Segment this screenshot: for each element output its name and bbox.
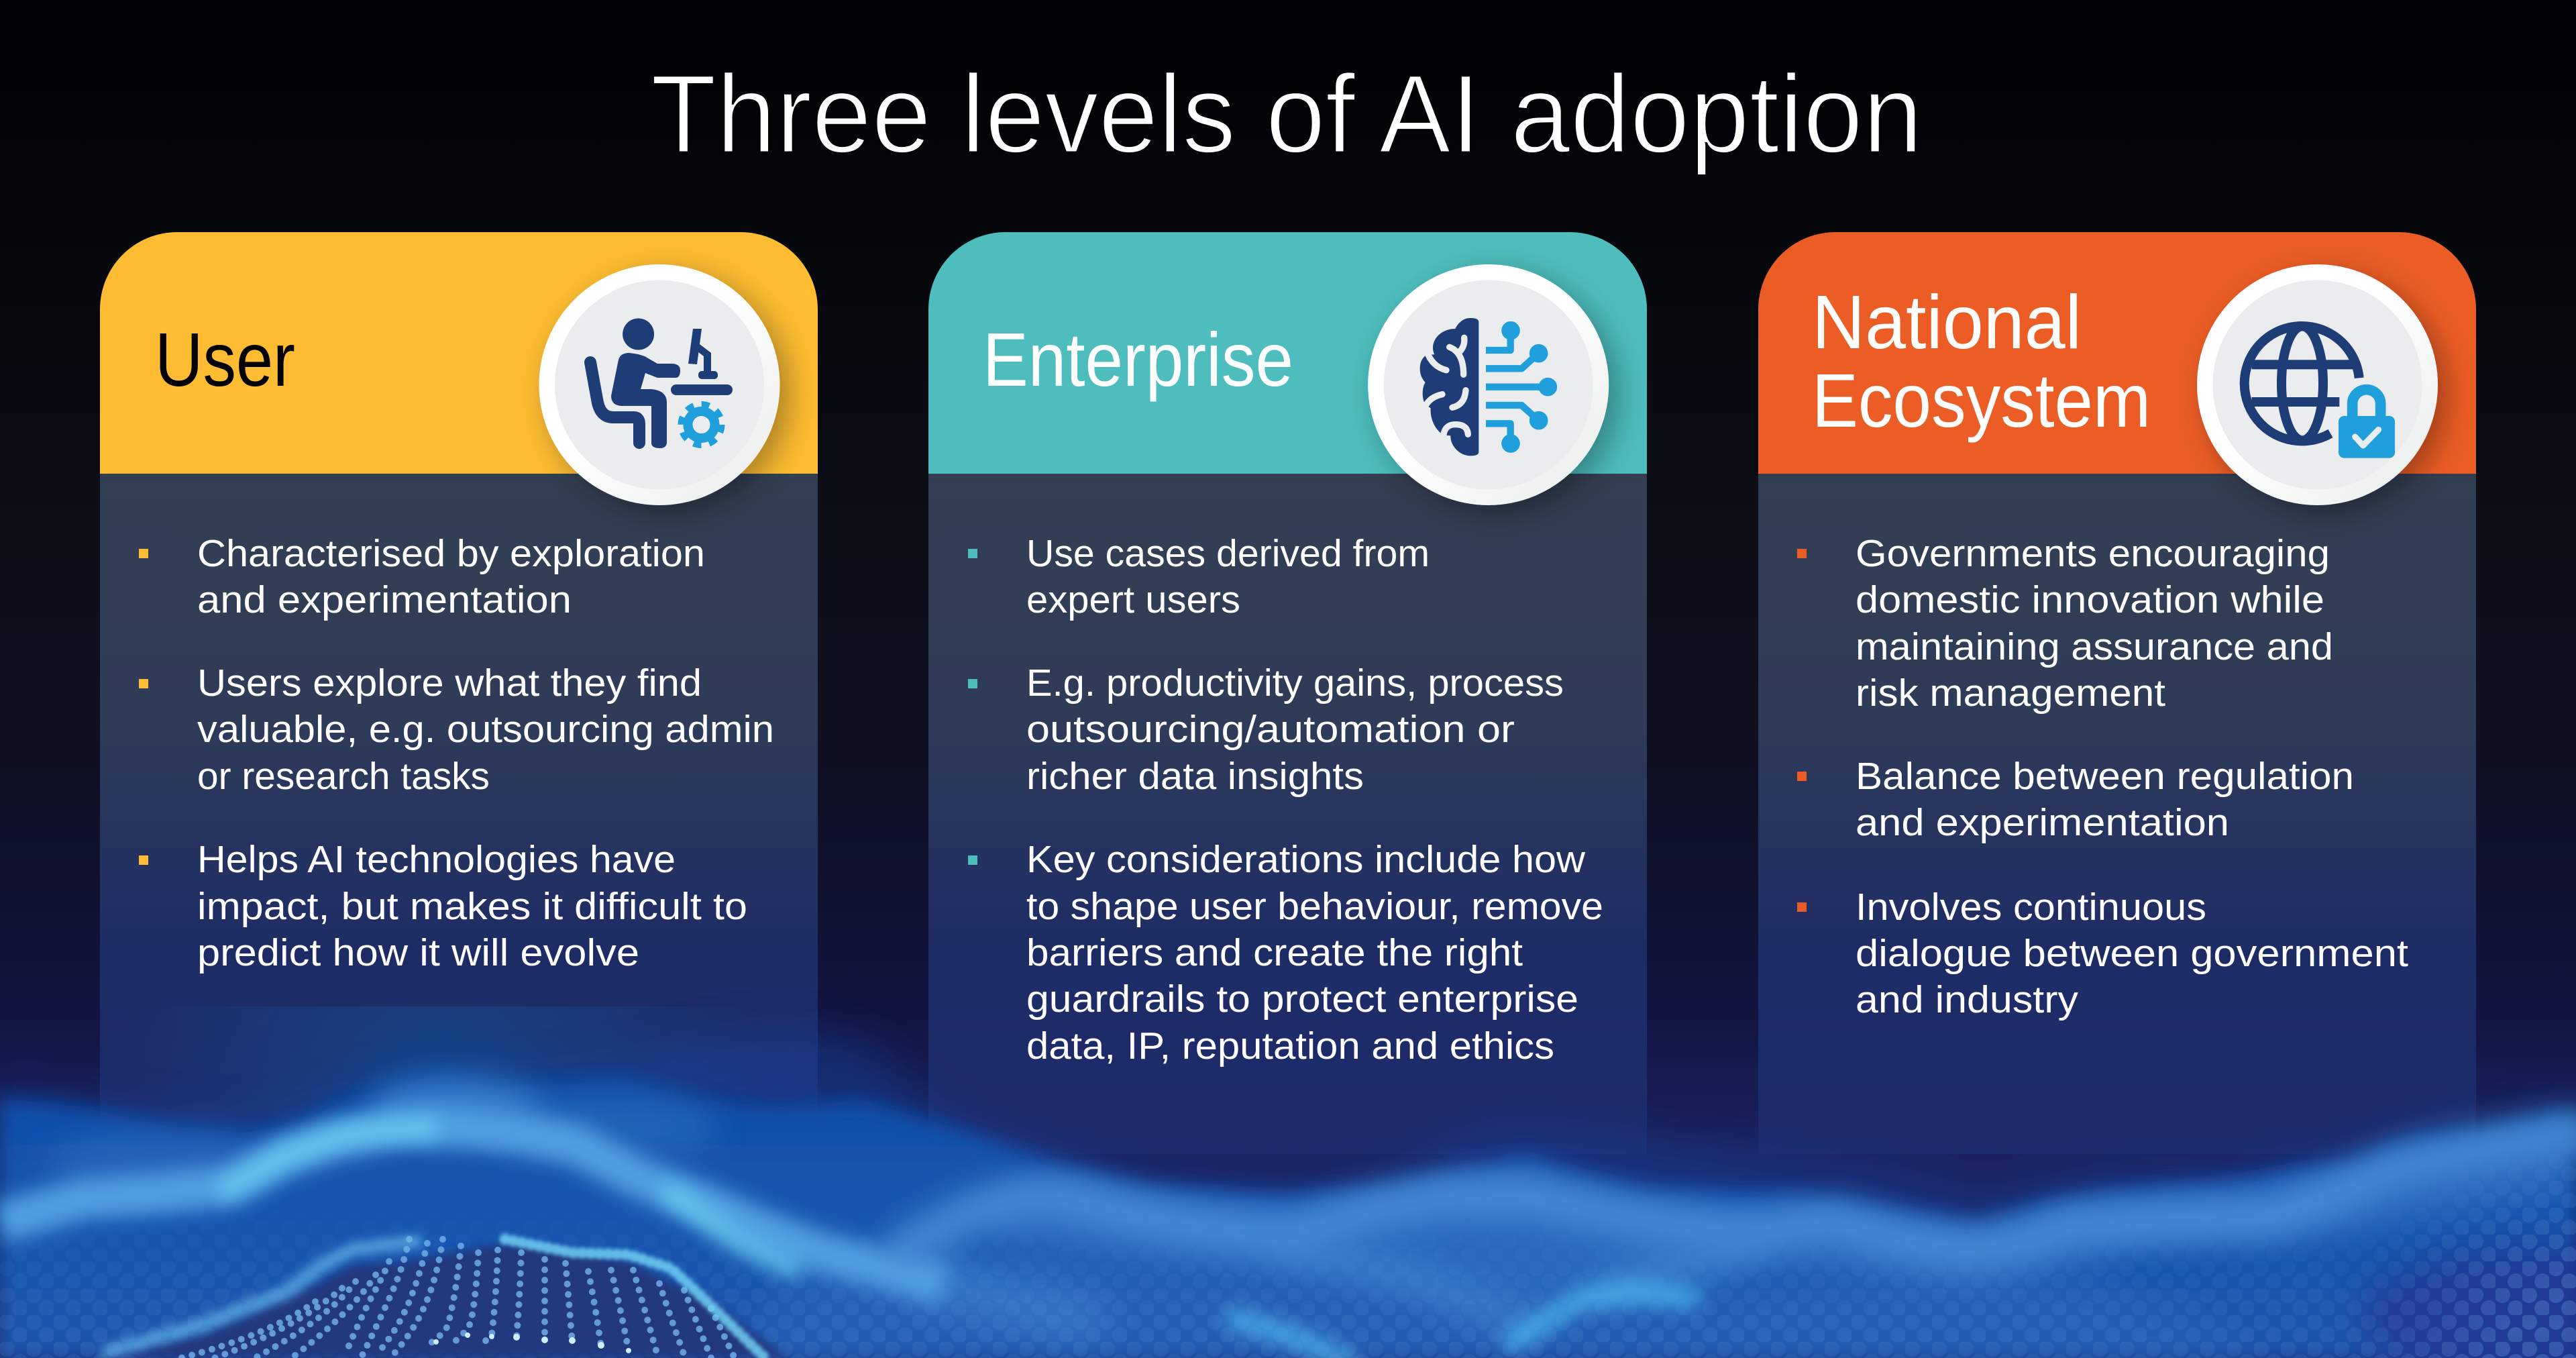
bullet list: National Ecosystem: risk management (1856, 672, 2165, 715)
bullet list: User: Users explore what they find (197, 662, 702, 704)
glow behind first peak (107, 1006, 778, 1221)
bullet list: User (139, 532, 774, 974)
bullet list: Enterprise: expert users (1026, 578, 1240, 621)
bullet list: National Ecosystem (1797, 532, 2408, 1021)
panel body: Enterprise (928, 232, 1647, 1154)
bullet list: Enterprise (968, 532, 1603, 1067)
broad middle haze (973, 1127, 2576, 1308)
bullet list: National Ecosystem: dialogue between government (1856, 932, 2408, 975)
bullet list: National Ecosystem: Governments encouraging (1856, 532, 2330, 575)
faint upper haze (0, 1027, 2576, 1358)
bullet list: User: and experimentation (197, 578, 572, 621)
bullet list: National Ecosystem: and industry (1856, 978, 2079, 1021)
wave: particle landscape (0, 1006, 2576, 1358)
bottom lighter haze (738, 1241, 2281, 1358)
bullet list: National Ecosystem: maintaining assurance and (1856, 625, 2333, 668)
bullet list: Enterprise: Use cases derived from (1026, 532, 1430, 575)
dot columns in hollow (181, 1239, 735, 1358)
heading: User: User (155, 317, 295, 402)
heading: Enterprise: Enterprise (983, 317, 1293, 402)
bullet list: Enterprise: to shape user behaviour, remove (1026, 885, 1603, 928)
panel: Enterprise (928, 232, 1647, 1154)
icon: globe with lock (2197, 264, 2438, 505)
heading: National Ecosystem: National (1812, 280, 2082, 364)
bright corner strand (1234, 1318, 1348, 1358)
bullet list: User: impact, but makes it difficult to (197, 885, 747, 928)
bullet list: Enterprise: outsourcing/automation or (1026, 708, 1515, 751)
bullet list: National Ecosystem: Involves continuous (1856, 886, 2206, 929)
bright highlight left (228, 1127, 792, 1268)
bullet list: National Ecosystem: and experimentation (1856, 801, 2229, 844)
dots: large field (0, 1295, 2396, 1358)
bullet list: User: Characterised by exploration (197, 532, 705, 575)
ribbon tail (926, 1278, 1087, 1318)
bullet list: Enterprise: guardrails to protect enterprise (1026, 978, 1578, 1021)
icon: brain circuit (1368, 264, 1609, 505)
bright ribbon left (0, 1127, 945, 1285)
panel: User (100, 232, 818, 1154)
bullet list: User: predict how it will evolve (197, 931, 639, 974)
lower bright ribbon top of hollow (505, 1239, 765, 1358)
upper haze: shoulder (490, 1094, 718, 1161)
bullet list: User: valuable, e.g. outsourcing admin (197, 708, 774, 751)
panel body: National Ecosystem (1758, 232, 2476, 1154)
bullet list: National Ecosystem: Balance between regulation (1856, 755, 2354, 798)
panel: National Ecosystem (1758, 232, 2476, 1154)
bright column tips (433, 1333, 631, 1353)
title: Three levels of AI adoption (651, 52, 1923, 176)
upper haze: first peak (369, 1079, 543, 1135)
bullet list: National Ecosystem: domestic innovation while (1856, 578, 2324, 621)
bullet list: Enterprise: data, IP, reputation and ethics (1026, 1025, 1554, 1067)
icon: person at desk (539, 264, 780, 505)
bullet list: Enterprise: richer data insights (1026, 755, 1364, 798)
bullet list: User: Helps AI technologies have (197, 838, 676, 881)
lower bright ribbon right (1513, 1292, 1690, 1342)
ribbon middle (904, 1132, 2576, 1250)
dots: corner field (2281, 1074, 2576, 1358)
panel body: User (100, 232, 818, 1154)
bullet list: User: or research tasks (197, 755, 490, 798)
lower fade ribbon (1288, 1241, 1744, 1322)
sea body (0, 1074, 2576, 1358)
upper haze: left hump (47, 1131, 275, 1198)
bullet list: Enterprise: E.g. productivity gains, process (1026, 662, 1564, 704)
dark hollow under first peak (107, 1243, 788, 1358)
bullet list: Enterprise: Key considerations include how (1026, 838, 1586, 881)
lower bright ribbon left (107, 1241, 416, 1352)
bullet list: Enterprise: barriers and create the right (1026, 931, 1523, 974)
heading: National Ecosystem (1812, 280, 2151, 443)
dark corner right (2361, 1241, 2576, 1358)
heading: National Ecosystem: Ecosystem (1812, 358, 2151, 443)
